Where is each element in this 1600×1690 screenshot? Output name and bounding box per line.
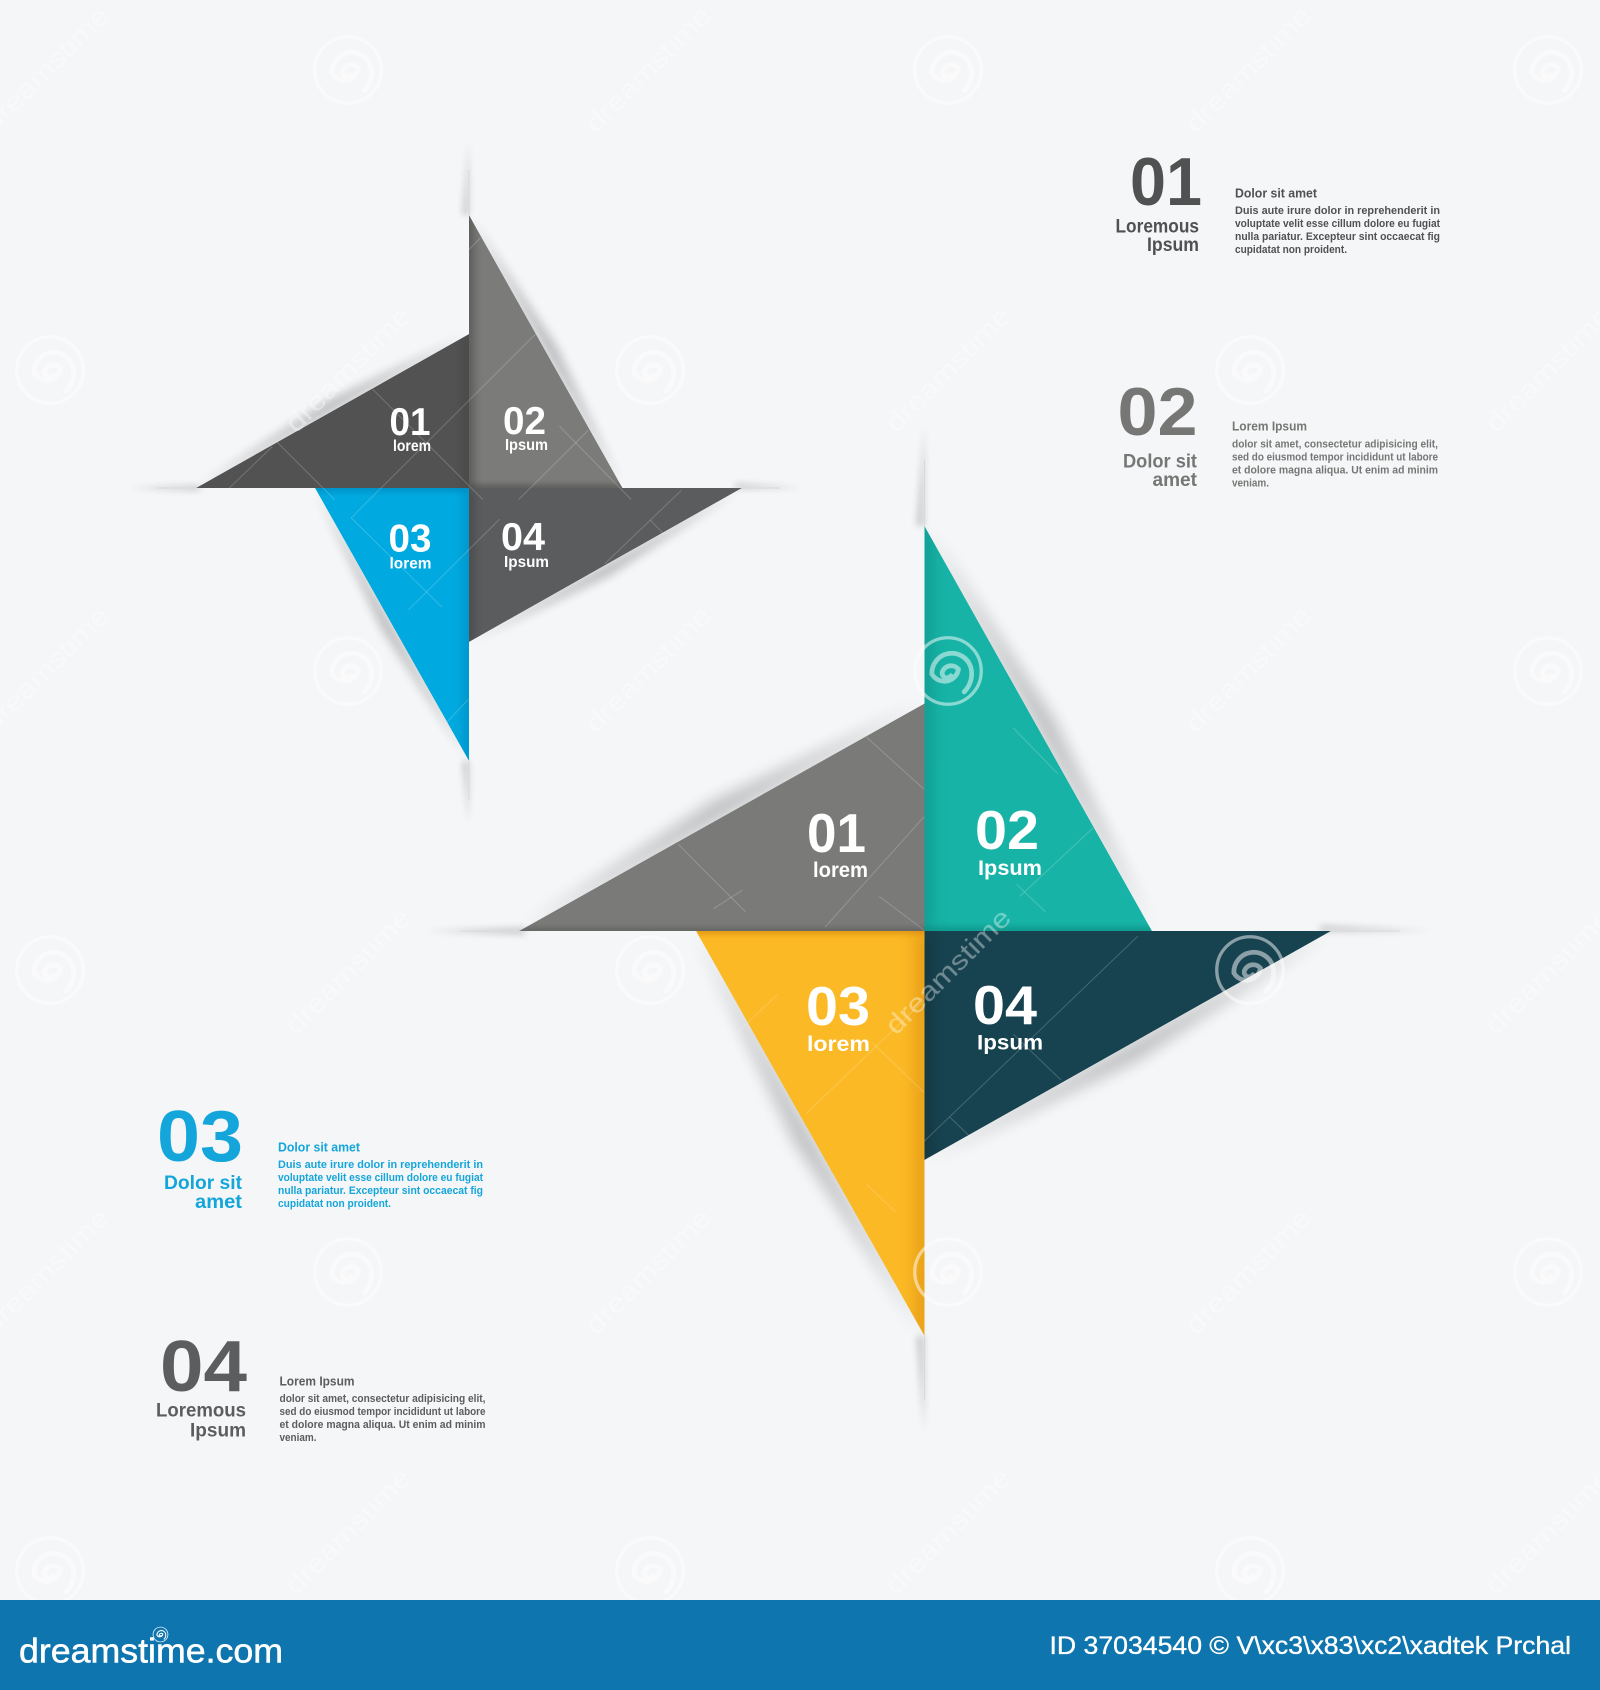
small pinwheel labels: Ipsum [504, 554, 549, 571]
watermark words: dreamstime [1479, 1462, 1600, 1600]
callout 03: 03 [157, 1097, 243, 1177]
callout 01: 01 [1130, 144, 1202, 220]
watermark words: dreamstime [579, 0, 717, 138]
watermark words: dreamstime [579, 1202, 717, 1340]
watermark words: dreamstime [879, 1462, 1017, 1600]
watermark words: dreamstime [1179, 1202, 1317, 1340]
large pinwheel labels: Ipsum [978, 857, 1042, 880]
watermark words: dreamstime [1179, 0, 1317, 138]
watermark words: dreamstime [279, 300, 417, 438]
callout 04: sed do eiusmod tempor incididunt ut labore [280, 1406, 486, 1418]
small pinwheel labels: lorem [393, 438, 431, 455]
small pinwheel [125, 140, 805, 825]
large pinwheel [425, 425, 1435, 1435]
callout 02: veniam. [1232, 478, 1269, 490]
callout 01: voluptate velit esse cillum dolore eu fugiat [1235, 218, 1440, 230]
small pinwheel labels: 01 [390, 401, 430, 444]
watermark words: dreamstime [1479, 300, 1600, 438]
large pinwheel watermark lines [678, 728, 1138, 1212]
callout 04: Loremous [156, 1400, 246, 1422]
small pinwheel labels: 04 [501, 516, 545, 559]
callout 02: dolor sit amet, consectetur adipisicing elit, [1232, 438, 1438, 450]
large pinwheel labels: 04 [973, 974, 1037, 1036]
callout 01: cupidatat non proident. [1235, 244, 1347, 256]
callout 02: Dolor sit [1123, 452, 1198, 472]
callout 02: 02 [1118, 374, 1198, 450]
callout 03: Dolor sit [164, 1173, 243, 1194]
callout 02 [1118, 374, 1438, 491]
icon: logo spiral [153, 1627, 168, 1642]
large triangle 01 grey [519, 704, 929, 934]
large pinwheel labels: 01 [807, 802, 866, 864]
small triangle 03 blue [315, 485, 471, 763]
callout 02: sed do eiusmod tempor incididunt ut labore [1232, 452, 1438, 464]
callout 03: voluptate velit esse cillum dolore eu fugiat [278, 1172, 483, 1184]
small pinwheel labels: 03 [388, 518, 432, 560]
large triangle 03 yellow [696, 928, 927, 1341]
callout 02: et dolore magna aliqua. Ut enim ad minim [1232, 464, 1438, 476]
small pinwheel labels: lorem [390, 556, 432, 572]
paper crease shadows around large pinwheel [425, 425, 1435, 1435]
large pinwheel labels: 03 [806, 975, 870, 1037]
large pinwheel labels [806, 799, 1043, 1056]
large pinwheel labels: lorem [807, 1033, 870, 1056]
watermark words: dreamstime [579, 600, 717, 738]
callout 03: Dolor sit amet [278, 1140, 361, 1154]
footer image id: ID 37034540 © V\xc3\x83\xc2\xadtek Prchal [1050, 1632, 1571, 1660]
watermark words: dreamstime [879, 902, 1017, 1040]
callout 02: Lorem Ipsum [1232, 420, 1307, 434]
callout 04: 04 [160, 1327, 247, 1407]
footer logo: dreamstime.com [19, 1632, 283, 1670]
callout 04: Ipsum [190, 1420, 246, 1442]
callout 01: Duis aute irure dolor in reprehenderit in [1235, 205, 1440, 217]
large pinwheel labels: lorem [813, 859, 868, 882]
callout 04 [156, 1327, 486, 1444]
callout 03: cupidatat non proident. [278, 1198, 391, 1210]
footer banner [0, 1600, 1600, 1690]
callout 03 [157, 1097, 483, 1213]
large triangle 02 teal [920, 520, 1155, 935]
small pinwheel watermark lines [227, 238, 681, 722]
callout 01: Loremous [1116, 216, 1199, 238]
callout 02: amet [1152, 470, 1198, 491]
callout 01: nulla pariatur. Excepteur sint occaecat fig [1235, 231, 1440, 243]
small triangle 02 grey [465, 210, 625, 491]
callout 04: dolor sit amet, consectetur adipisicing elit, [280, 1393, 486, 1405]
large pinwheel labels: Ipsum [977, 1032, 1043, 1054]
callout 04: veniam. [280, 1432, 316, 1444]
small triangle 04 charcoal [466, 488, 742, 643]
paper crease shadows around small pinwheel [125, 140, 805, 825]
watermark words: dreamstime [279, 902, 417, 1040]
small triangle 01 dark grey [196, 330, 470, 490]
callout 01: Dolor sit amet [1235, 186, 1318, 200]
callout 01: Ipsum [1147, 235, 1199, 256]
watermark words: dreamstime [279, 1462, 417, 1600]
watermark words: dreamstime [1179, 600, 1317, 738]
callout 03: amet [195, 1192, 243, 1213]
watermark words: dreamstime [1479, 902, 1600, 1040]
callout 03: nulla pariatur. Excepteur sint occaecat fig [278, 1185, 483, 1197]
callout 03: Duis aute irure dolor in reprehenderit in [278, 1159, 483, 1171]
watermark words: dreamstime [879, 300, 1017, 438]
callout 04: et dolore magna aliqua. Ut enim ad minim [280, 1419, 486, 1431]
small pinwheel labels [388, 400, 549, 572]
small pinwheel labels: Ipsum [505, 437, 548, 454]
large pinwheel labels: 02 [975, 799, 1039, 861]
callout 01 [1116, 144, 1440, 256]
small pinwheel labels: 02 [503, 400, 546, 443]
callout 04: Lorem Ipsum [280, 1374, 354, 1388]
large triangle 04 navy [920, 931, 1331, 1163]
